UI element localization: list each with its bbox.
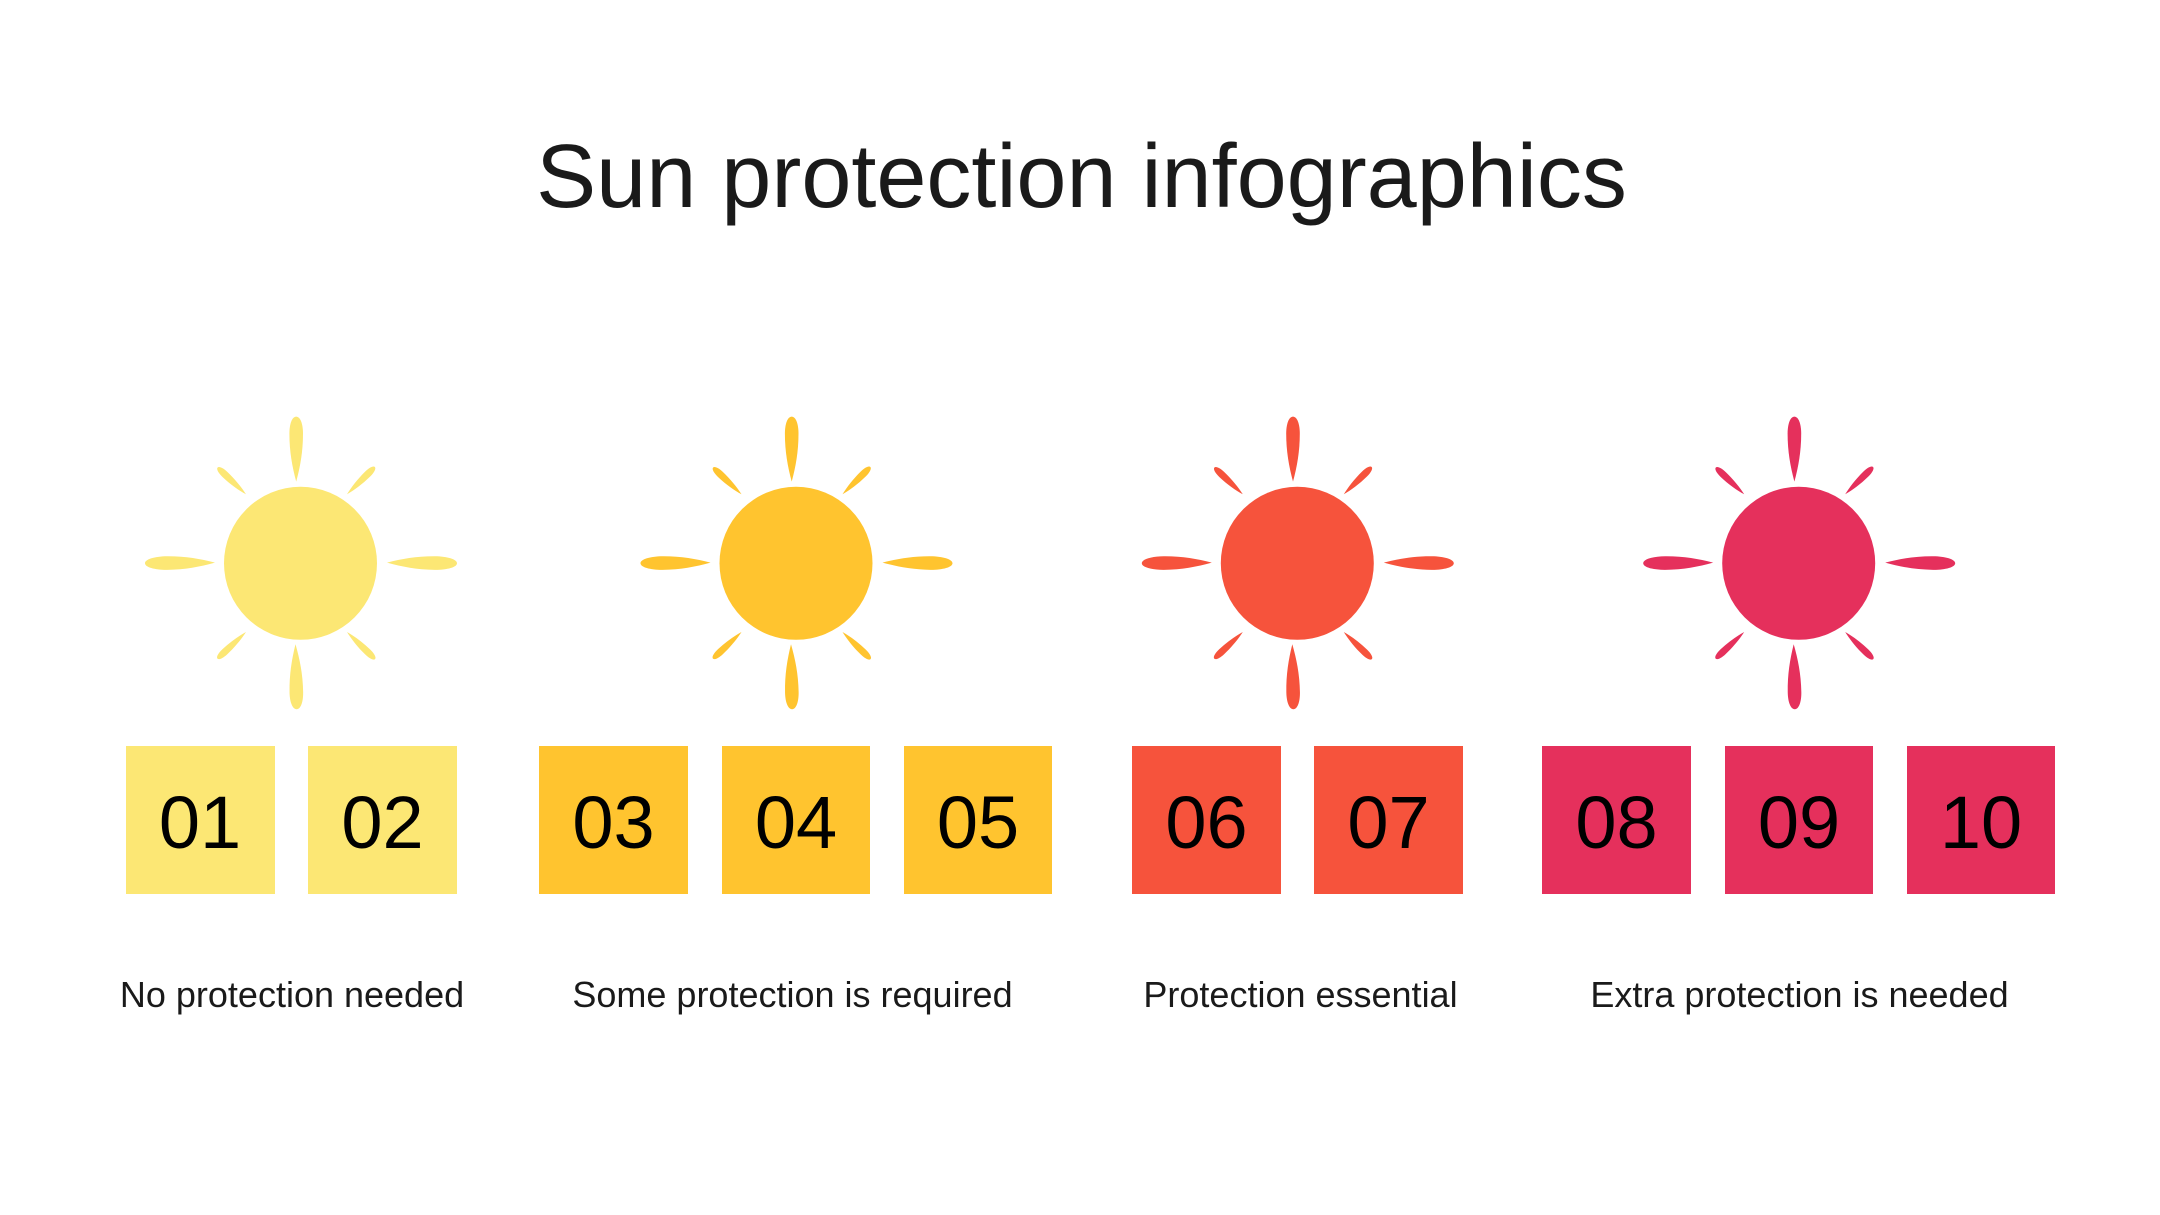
square 06: 06 <box>1165 781 1248 864</box>
square 10 <box>1907 746 2055 894</box>
square 05: 05 <box>937 781 1019 864</box>
square 07: 07 <box>1347 781 1430 864</box>
square 09: 09 <box>1758 781 1840 864</box>
square 07 <box>1314 746 1463 894</box>
icon: amber sun <box>640 417 953 709</box>
label: extra protection is needed: Extra protection is needed <box>1590 974 2009 1015</box>
panel: extra protection is needed <box>1542 417 2055 1015</box>
label: protection essential: Protection essential <box>1143 974 1458 1015</box>
square 02: 02 <box>341 781 424 864</box>
icon: red sun <box>1142 417 1454 709</box>
panel: protection essential <box>1132 417 1463 1015</box>
square 05 <box>904 746 1052 894</box>
square 03 <box>539 746 688 894</box>
icon: yellow sun <box>145 417 457 709</box>
label: no protection needed: No protection needed <box>120 974 464 1015</box>
square 01: 01 <box>159 781 241 864</box>
icon: crimson sun <box>1643 417 1955 709</box>
square 08: 08 <box>1575 781 1658 864</box>
square 08 <box>1542 746 1691 894</box>
square 03: 03 <box>572 781 655 864</box>
square 06 <box>1132 746 1281 894</box>
square 10: 10 <box>1940 781 2022 864</box>
panel: some protection is required <box>539 417 1052 1015</box>
square 04: 04 <box>755 781 837 864</box>
square 04 <box>722 746 870 894</box>
label: some protection is required: Some protection is required <box>572 974 1013 1015</box>
panel: no protection needed <box>120 417 464 1015</box>
square 09 <box>1725 746 1873 894</box>
square 02 <box>308 746 457 894</box>
title: Sun protection infographics <box>536 127 1627 227</box>
square 01 <box>126 746 275 894</box>
